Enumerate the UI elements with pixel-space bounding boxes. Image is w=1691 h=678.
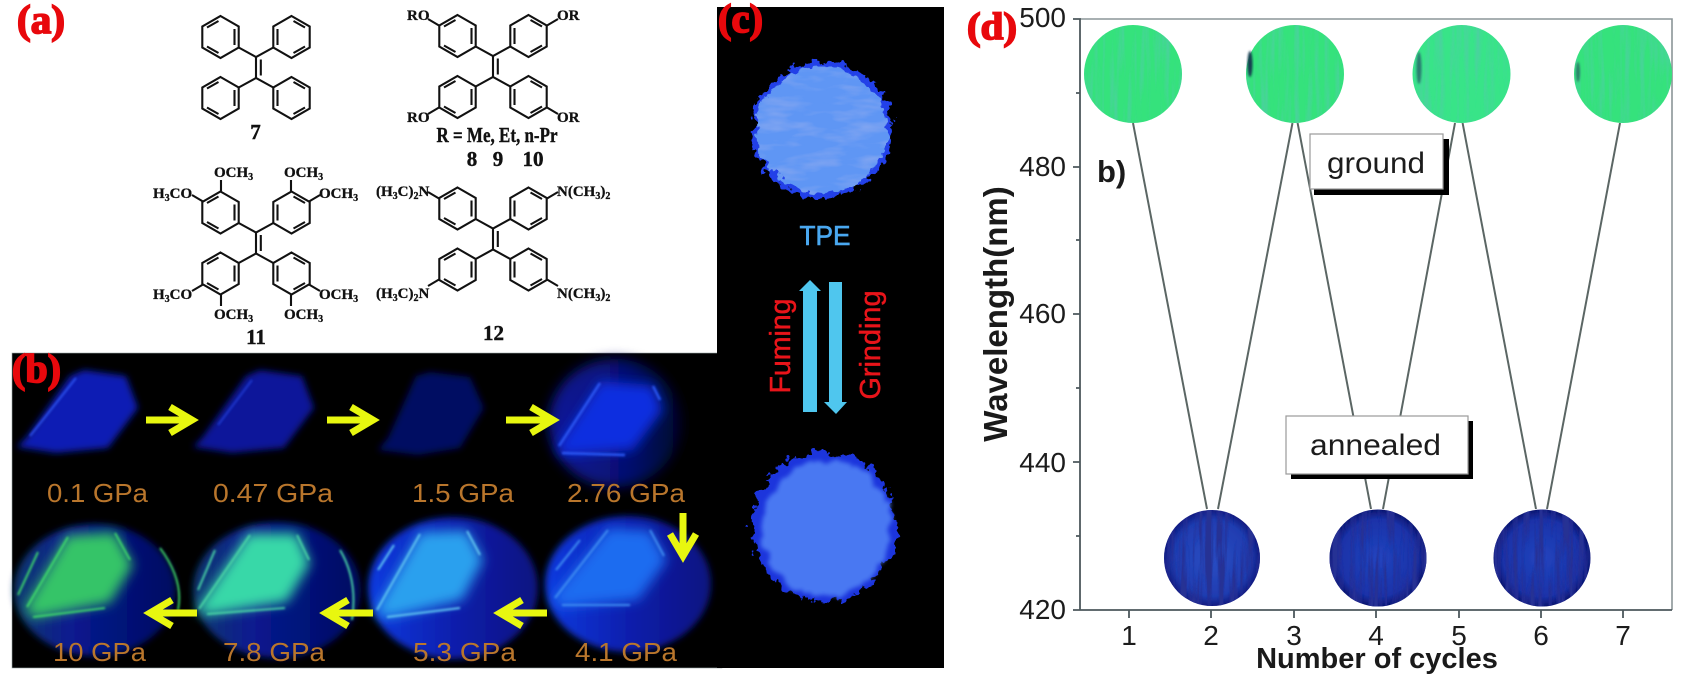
structure 12: C) [398, 286, 414, 302]
crystal 7.8 GPa: 7.8 GPa [223, 637, 326, 667]
sample photo: cycle 4 annealed [1330, 510, 1426, 606]
structure 12: 3 [595, 293, 600, 304]
structure 11: 3 [165, 193, 170, 204]
structure 11: 3 [353, 193, 358, 204]
structure 12: 12 [483, 321, 504, 345]
structure 12: C) [398, 184, 414, 200]
structure 11: OCH [319, 287, 353, 303]
structure 12: 2 [605, 293, 610, 304]
structures 8, 9, 10: RO [407, 110, 430, 126]
arrow down [824, 282, 847, 414]
structure 12: ) [600, 286, 605, 302]
structure 12: ) [600, 184, 605, 200]
structures 8, 9, 10: RO [407, 8, 430, 24]
structures 8, 9, 10: R = Me, Et, n-Pr [436, 123, 558, 147]
crystal 5.3 GPa: 5.3 GPa [413, 637, 517, 667]
x axis tick labels: 1 [1121, 620, 1137, 651]
label Fuming: Fuming [765, 298, 797, 394]
y axis tick labels: 420 [1019, 594, 1066, 625]
arrow down [670, 513, 696, 556]
structure 12: N(CH [557, 184, 595, 200]
crystal 4.1 GPa [545, 516, 711, 667]
crystal 10 GPa: 10 GPa [53, 637, 147, 667]
structure 7 [202, 16, 310, 144]
structure 11: OCH [214, 307, 248, 323]
y axis tick labels: 460 [1019, 298, 1066, 329]
structure 11: 3 [165, 294, 170, 305]
arrow up [799, 280, 821, 412]
legend: annealed: annealed [1310, 429, 1441, 462]
crystal 5.3 GPa [368, 517, 538, 667]
structures 8, 9, 10: 9 [493, 147, 503, 171]
structures 8, 9, 10: OR [557, 110, 580, 126]
sample photo: cycle 1 ground [1084, 25, 1182, 123]
structure 12: 2 [605, 191, 610, 202]
structure 12: N [418, 286, 430, 302]
structure 11: CO [170, 186, 192, 202]
structures 8, 9, 10 [407, 8, 580, 171]
legend: annealed [1286, 416, 1473, 479]
arrow right 0.47 [327, 407, 373, 433]
structure 11: OCH [284, 307, 318, 323]
structure 12: 3 [595, 191, 600, 202]
x axis tick labels: 3 [1286, 620, 1302, 651]
structure 12: 2 [414, 293, 418, 304]
structure 12: N [418, 184, 430, 200]
arrow left 5.3 [500, 600, 547, 626]
sample photo: cycle 7 ground [1574, 25, 1672, 123]
x axis tick labels: 5 [1451, 620, 1467, 651]
arrow left 7.8 [326, 600, 373, 626]
y axis tick labels: 480 [1019, 151, 1066, 182]
crystal 0.47 GPa [193, 370, 334, 508]
crystal 10 GPa [14, 524, 179, 667]
structure 11: OCH [284, 165, 318, 181]
label Grinding: Grinding [855, 290, 887, 400]
legend: ground: ground [1327, 147, 1425, 180]
structure 11: OCH [214, 165, 248, 181]
structure 11 [153, 165, 358, 349]
crystal 0.47 GPa: 0.47 GPa [213, 478, 334, 508]
x axis tick labels: 4 [1368, 620, 1384, 651]
sample photo: cycle 2 annealed [1164, 510, 1260, 606]
structure 11: 3 [318, 172, 323, 183]
powder: bottom [752, 451, 896, 601]
panel: (a) chemical structures [17, 0, 610, 349]
x axis tick labels: 7 [1615, 620, 1631, 651]
x axis tick labels [1121, 620, 1631, 651]
structure 11: 3 [248, 172, 253, 183]
zigzag data lines [1133, 123, 1620, 509]
structure 12 [376, 184, 610, 345]
structure 11: H [153, 287, 165, 303]
sample photo: cycle 5 ground [1412, 25, 1510, 123]
crystal 1.5 GPa: 1.5 GPa [412, 478, 515, 508]
crystal 4.1 GPa: 4.1 GPa [575, 637, 678, 667]
crystal 0.1 GPa [17, 370, 149, 508]
arrow right 0.1 [146, 407, 192, 433]
axes frame [1073, 19, 1672, 618]
structure 12: 2 [414, 191, 418, 202]
x axis tick labels: 6 [1533, 620, 1549, 651]
panel: (c) TPE mechanochromism [718, 0, 896, 601]
y axis tick labels: 500 [1019, 2, 1066, 33]
sample photo: cycle 6 annealed [1494, 510, 1590, 606]
panel: (c) background [717, 7, 944, 668]
structure 11: 11 [246, 325, 266, 349]
arrow left 10 [150, 600, 197, 626]
y axis tick labels: 440 [1019, 447, 1066, 478]
structure 11: 3 [248, 314, 253, 325]
structures 8, 9, 10: 10 [522, 147, 544, 171]
structure 11: H [153, 186, 165, 202]
panel label (d): (d) [967, 6, 1017, 48]
y axis title: Wavelength(nm) [977, 186, 1014, 442]
structures 8, 9, 10: 8 [467, 147, 477, 171]
structure 12: (H [376, 286, 393, 302]
panel label (b): (b) [12, 346, 61, 391]
crystal 7.8 GPa [193, 522, 361, 667]
arrow right 1.5 [506, 407, 553, 433]
panel: (d) wavelength vs number of cycles chart [967, 2, 1672, 675]
crystal 0.1 GPa: 0.1 GPa [47, 478, 149, 508]
legend: ground [1310, 134, 1449, 195]
y axis tick labels [1019, 2, 1066, 625]
x axis tick labels: 2 [1203, 620, 1219, 651]
structure 11: 3 [353, 294, 358, 305]
panel: (b) pressure series background [12, 353, 722, 668]
label TPE: TPE [800, 220, 850, 251]
structure 12: 3 [393, 191, 398, 202]
x axis title: Number of cycles [1256, 643, 1498, 675]
structure 12: N(CH [557, 286, 595, 302]
structure 11: CO [170, 287, 192, 303]
inner label b): b) [1097, 154, 1126, 189]
structure 7: 7 [250, 120, 261, 144]
structure 11: 3 [318, 314, 323, 325]
structures 8, 9, 10: OR [557, 8, 580, 24]
crystal 2.76 GPa: 2.76 GPa [567, 478, 686, 508]
crystal 1.5 GPa [378, 372, 515, 508]
panel: (b) crystals under pressure [12, 346, 711, 667]
structure 12: 3 [393, 293, 398, 304]
crystal 2.76 GPa [549, 359, 686, 508]
structure 11: OCH [319, 186, 353, 202]
structure 12: (H [376, 184, 393, 200]
powder: top [752, 62, 892, 198]
sample photo: cycle 3 ground [1246, 25, 1344, 123]
